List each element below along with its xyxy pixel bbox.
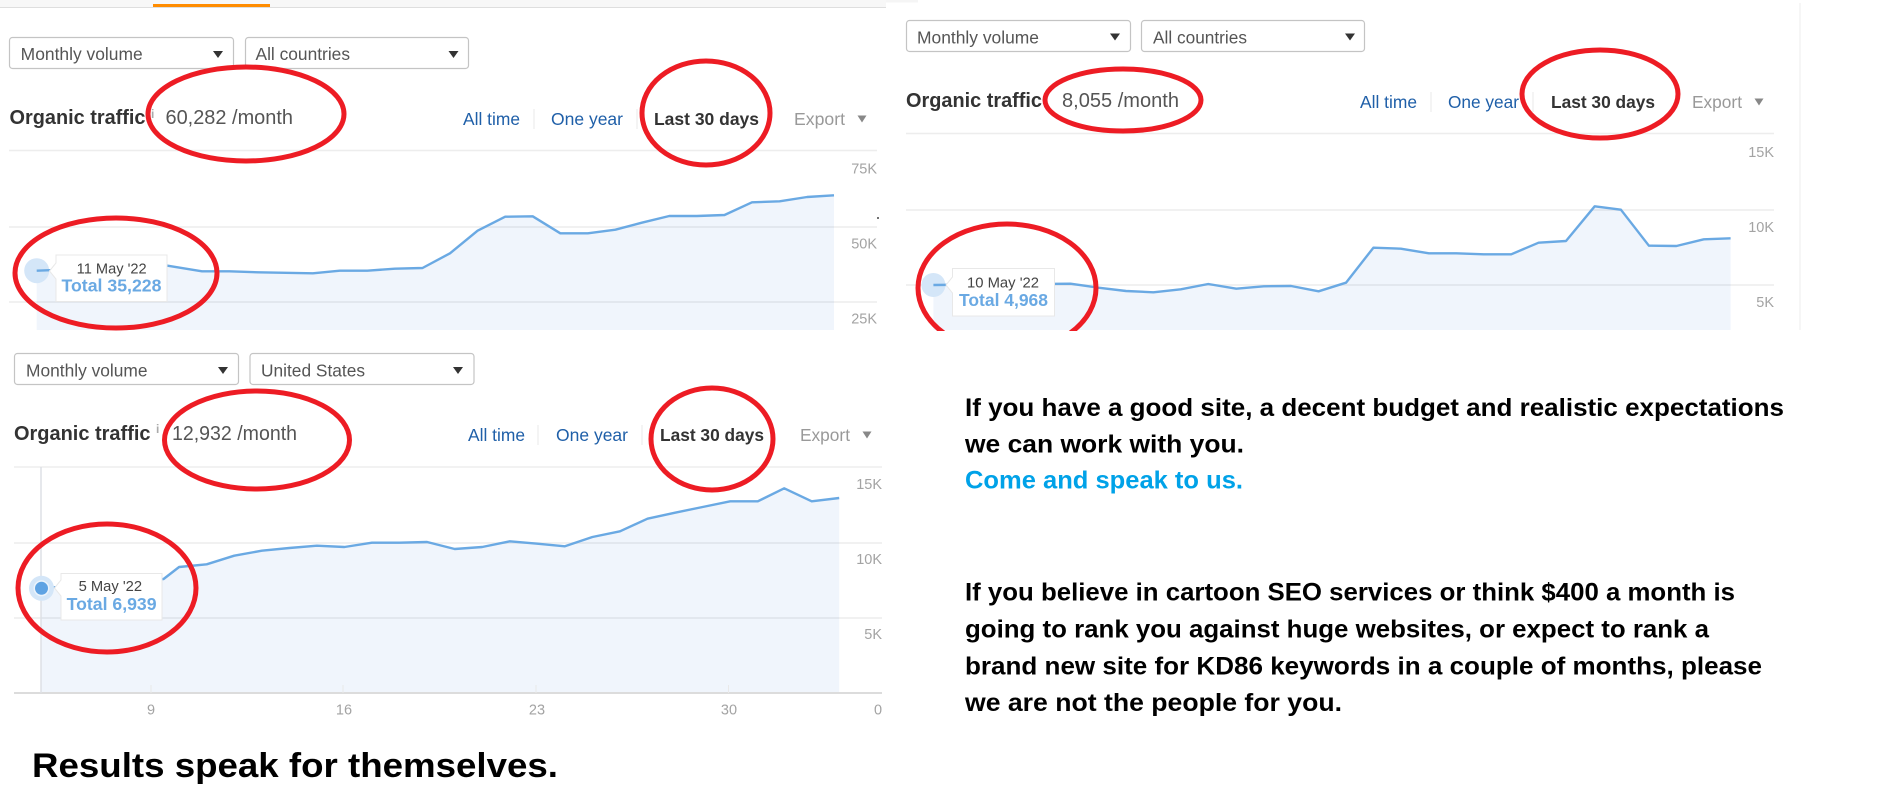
dropdown: monthly volume: Monthly volume [26, 360, 148, 380]
red circle: tooltip [916, 222, 1098, 331]
red circle: last 30 days [1522, 50, 1678, 138]
area chart: traffic: 30 [721, 702, 737, 718]
area chart: traffic: 9 [147, 702, 155, 718]
tooltip: 10 May: Total 4,968 [959, 290, 1048, 310]
organic traffic heading: Organic traffic [906, 90, 1042, 112]
red circle: last 30 days [642, 61, 770, 165]
organic traffic heading: Organic traffic [10, 107, 146, 129]
text block: who we can work with [964, 395, 1784, 494]
tooltip: 5 May: Total 6,939 [67, 594, 157, 614]
export control: Export [1692, 92, 1742, 112]
red circle: tooltip [15, 218, 217, 328]
time range tabs: Last 30 days [660, 425, 764, 445]
info marker: i [151, 107, 154, 121]
export control: Export [800, 425, 850, 445]
panel: United States traffic, 12,932 per month [14, 354, 882, 718]
area chart: traffic: 0 [874, 702, 882, 718]
time range tabs: One year [551, 109, 623, 129]
heading: results speak for themselves: Results speak for themselves. [32, 747, 558, 785]
tooltip: 5 May: 5 May '22 [79, 579, 142, 595]
tooltip: 5 May [54, 574, 162, 620]
red circle: monthly value [1045, 69, 1201, 131]
red circle: monthly value [148, 67, 344, 161]
tooltip: 11 May: 11 May '22 [77, 261, 147, 277]
time range tabs: One year [1448, 92, 1519, 112]
text block: who we are not for: If you believe in cartoon SEO services or think $400 a month is [965, 580, 1735, 606]
traffic value: 60,282 /month [166, 107, 293, 129]
time range tabs [463, 109, 759, 129]
time range tabs: One year [556, 425, 628, 445]
export control [795, 113, 866, 128]
dropdown: monthly volume [10, 38, 234, 68]
text block: who we are not for [964, 580, 1762, 717]
red circle: tooltip [18, 524, 196, 652]
time range tabs: All time [463, 109, 520, 129]
time range tabs: All time [468, 425, 525, 445]
area chart: traffic: 10K [856, 552, 882, 568]
panel edge [886, 0, 1800, 330]
dropdown: monthly volume: Monthly volume [21, 44, 143, 64]
traffic value: 12,932 /month [172, 423, 297, 445]
panel: all countries traffic, 8,055 per month [886, 0, 1800, 352]
time range tabs [1360, 92, 1655, 112]
panel: all countries traffic, 60,282 per month [0, 0, 886, 330]
tooltip: 10 May [946, 268, 1054, 316]
area chart: traffic: 10K [1748, 220, 1774, 236]
area chart: traffic [14, 467, 882, 718]
area chart: traffic: 75K [851, 162, 877, 178]
area chart: traffic: 5K [864, 627, 882, 643]
area chart: traffic: 15K [856, 477, 882, 493]
call to action: Come and speak to us. [965, 468, 1243, 494]
text block: who we can work with: If you have a good site, a decent budget and realistic expectations [965, 395, 1784, 422]
area chart: traffic: 16 [336, 702, 352, 718]
tooltip: 11 May [50, 255, 167, 302]
area chart: traffic: 23 [529, 702, 545, 718]
time range tabs: All time [1360, 92, 1417, 112]
tooltip: 10 May: 10 May '22 [967, 276, 1039, 292]
text block: who we can work with: we can work with you. [964, 432, 1244, 458]
dropdown: monthly volume [906, 20, 1130, 52]
export control [1693, 96, 1764, 112]
area chart: traffic: 15K [1748, 145, 1774, 161]
dropdown: United States: United States [261, 360, 365, 380]
dropdown: all countries [246, 38, 468, 68]
area chart: traffic: 5K [1756, 295, 1774, 311]
info marker: i [156, 422, 159, 436]
dropdown: all countries [1142, 20, 1364, 52]
red circle: monthly value [164, 391, 350, 489]
text block: who we are not for: going to rank you against huge websites, or expect to rank a [965, 616, 1709, 644]
time range tabs [468, 425, 764, 445]
text block: who we are not for: we are not the people for you. [964, 690, 1342, 717]
area chart: traffic: 25K [851, 312, 877, 328]
time range tabs: Last 30 days [654, 109, 759, 129]
dropdown: monthly volume: Monthly volume [917, 28, 1039, 48]
dropdown: monthly volume [14, 354, 238, 384]
dropdown: United States [250, 354, 474, 384]
organic traffic heading: Organic traffic [14, 423, 150, 445]
area chart: traffic [9, 150, 879, 330]
navigation tab bar [0, 4, 886, 8]
red circle: last 30 days [651, 388, 773, 490]
tooltip: 11 May: Total 35,228 [62, 276, 162, 296]
time range tabs: Last 30 days [1551, 92, 1655, 112]
area chart: traffic [906, 134, 1774, 330]
text block: who we are not for: brand new site for KD86 keywords in a couple of months, please [965, 654, 1762, 680]
area chart: traffic: 50K [851, 236, 877, 252]
dropdown: all countries: All countries [256, 44, 350, 64]
export control: Export [794, 109, 845, 129]
traffic value: 8,055 /month [1062, 90, 1179, 112]
dropdown: all countries: All countries [1153, 28, 1247, 48]
